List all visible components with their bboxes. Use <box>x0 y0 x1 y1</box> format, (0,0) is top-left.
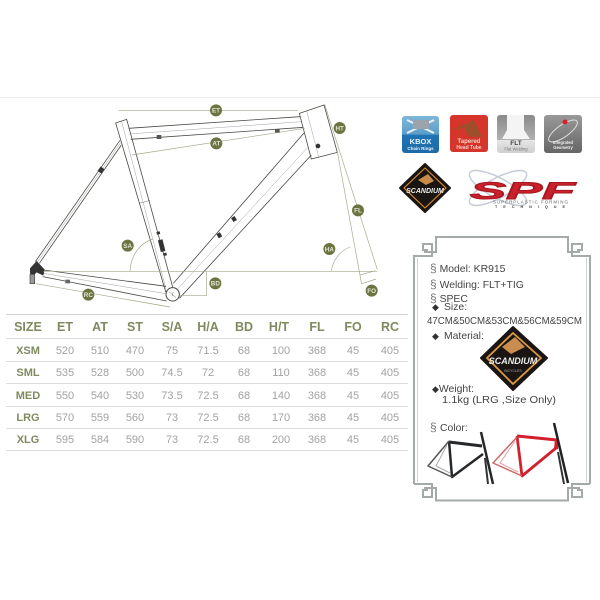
row MED: 550 <box>56 390 74 402</box>
row XSM: 405 <box>381 345 399 357</box>
row XSM: 68 <box>238 345 250 357</box>
dimension badges <box>82 104 378 301</box>
icon: KBOX chain rings <box>402 116 439 153</box>
row LRG: 170 <box>272 412 290 424</box>
table header: ET <box>57 320 73 334</box>
scandium material badge <box>481 327 547 390</box>
row XSM: 520 <box>56 345 74 357</box>
row MED: 73.5 <box>161 390 183 402</box>
welding: § Welding: FLT+TIG <box>430 277 524 291</box>
dimension badges: ET <box>212 108 220 115</box>
table header: FO <box>344 320 362 334</box>
scandium badge: SCANDIUM <box>406 188 444 195</box>
row XSM: 368 <box>308 345 326 357</box>
row XLG <box>17 434 399 446</box>
row MED: 530 <box>126 390 144 402</box>
row XLG: 200 <box>272 434 290 446</box>
row XLG: 368 <box>308 434 326 446</box>
row XLG: 405 <box>381 434 399 446</box>
row XSM: 75 <box>166 345 178 357</box>
row XSM: 470 <box>126 345 144 357</box>
row MED: 540 <box>91 390 109 402</box>
weight value: 1.1kg (LRG ,Size Only) <box>442 395 556 406</box>
frame geometry diagram <box>30 104 378 307</box>
table header: H/A <box>197 320 219 334</box>
row SML: 74.5 <box>161 367 183 379</box>
icon: integrated geometry: Integrated <box>553 140 574 145</box>
size list: 47CM&50CM&53CM&56CM&59CM <box>427 316 582 327</box>
icon: integrated geometry <box>544 115 582 153</box>
frame tubes <box>35 105 337 301</box>
dimension badges: RC <box>84 292 93 299</box>
table header: S/A <box>162 320 182 334</box>
SPF logo: TECHNIQUE <box>495 205 565 209</box>
row XLG: XLG <box>17 434 39 446</box>
row MED: 68 <box>238 390 250 402</box>
row SML: 500 <box>126 367 144 379</box>
material: Material: <box>444 331 484 342</box>
spec panel border <box>414 237 590 500</box>
SPF logo: SPF <box>470 178 578 205</box>
icon: tapered head tube: Tapered <box>458 139 481 145</box>
row XSM: 71.5 <box>197 345 219 357</box>
row SML: 72 <box>202 367 214 379</box>
row XSM: XSM <box>16 345 40 357</box>
row LRG: 405 <box>381 412 399 424</box>
size table <box>6 320 408 450</box>
icon: KBOX chain rings: KBOX <box>410 137 431 146</box>
icon: FLT flat welding <box>497 115 535 153</box>
red frame photo <box>493 423 568 484</box>
table header: RC <box>381 320 399 334</box>
icon: tapered head tube <box>450 115 488 152</box>
icon: FLT flat welding: FLT <box>510 140 522 147</box>
row XLG: 584 <box>91 434 109 446</box>
row LRG: 570 <box>56 412 74 424</box>
row XLG: 68 <box>238 434 250 446</box>
row SML: 528 <box>91 367 109 379</box>
row LRG: 45 <box>347 412 359 424</box>
icon: FLT flat welding: Flat Welding <box>504 146 528 152</box>
row LRG: 560 <box>126 412 144 424</box>
row LRG: 559 <box>91 412 109 424</box>
icon: tapered head tube: Head Tube <box>456 145 482 151</box>
table header <box>14 320 399 334</box>
icon: KBOX chain rings: Chain Rings <box>407 146 434 151</box>
row XLG: 73 <box>166 434 178 446</box>
color: § <box>430 420 437 434</box>
icon: integrated geometry: Geometry <box>553 145 573 150</box>
model: § Model: KR915 <box>430 261 506 275</box>
table header: FL <box>309 320 325 334</box>
row SML: 405 <box>381 367 399 379</box>
row XLG: 590 <box>126 434 144 446</box>
SPF logo <box>465 164 578 212</box>
table header: SIZE <box>14 320 42 334</box>
color: Color: <box>440 423 468 434</box>
row SML: 45 <box>347 367 359 379</box>
row MED: 405 <box>381 390 399 402</box>
size: ◆ <box>432 302 439 312</box>
row XLG: 72.5 <box>197 434 219 446</box>
black frame photo <box>428 432 493 484</box>
weight: ◆Weight: <box>432 384 474 395</box>
table header: ST <box>127 320 143 334</box>
spec text <box>427 261 582 434</box>
material: ◆ <box>432 331 439 341</box>
row SML: 68 <box>238 367 250 379</box>
row LRG <box>16 412 399 424</box>
dimension badges: FL <box>354 208 362 215</box>
dimension badges: HA <box>325 246 334 253</box>
dimension lines <box>36 104 377 307</box>
row LRG: LRG <box>16 412 40 424</box>
scandium badge <box>400 164 450 212</box>
row SML: SML <box>16 367 40 379</box>
scandium material badge: BICYCLES <box>504 369 522 373</box>
SPF logo: SUPERPLASTIC FORMING <box>493 200 568 204</box>
row SML: 368 <box>308 367 326 379</box>
table header: BD <box>235 320 253 334</box>
dimension badges: HT <box>335 125 344 132</box>
dimension badges: BD <box>211 281 220 288</box>
dimension badges: FO <box>367 288 376 295</box>
row XSM: 100 <box>272 345 290 357</box>
row MED: 45 <box>347 390 359 402</box>
dimension badges: AT <box>212 141 220 148</box>
row LRG: 73 <box>166 412 178 424</box>
table header: AT <box>92 320 108 334</box>
row SML: 535 <box>56 367 74 379</box>
row MED: 368 <box>308 390 326 402</box>
row MED <box>16 390 399 402</box>
row LRG: 368 <box>308 412 326 424</box>
spec heading: § SPEC <box>430 291 468 305</box>
row LRG: 68 <box>238 412 250 424</box>
row XSM <box>16 345 399 357</box>
dimension badges: SA <box>123 243 132 250</box>
table header: H/T <box>269 320 289 334</box>
row SML <box>16 367 399 379</box>
dropout and small fittings <box>30 129 320 284</box>
row SML: 110 <box>272 367 290 379</box>
row XLG: 45 <box>347 434 359 446</box>
row MED: 72.5 <box>197 390 219 402</box>
row XLG: 595 <box>56 434 74 446</box>
scandium material badge: SCANDIUM <box>489 356 538 366</box>
row LRG: 72.5 <box>197 412 219 424</box>
row XSM: 510 <box>91 345 109 357</box>
feature icons row <box>402 115 582 153</box>
row MED: 140 <box>272 390 290 402</box>
row MED: MED <box>16 390 40 402</box>
size: Size: <box>444 302 467 313</box>
row XSM: 45 <box>347 345 359 357</box>
